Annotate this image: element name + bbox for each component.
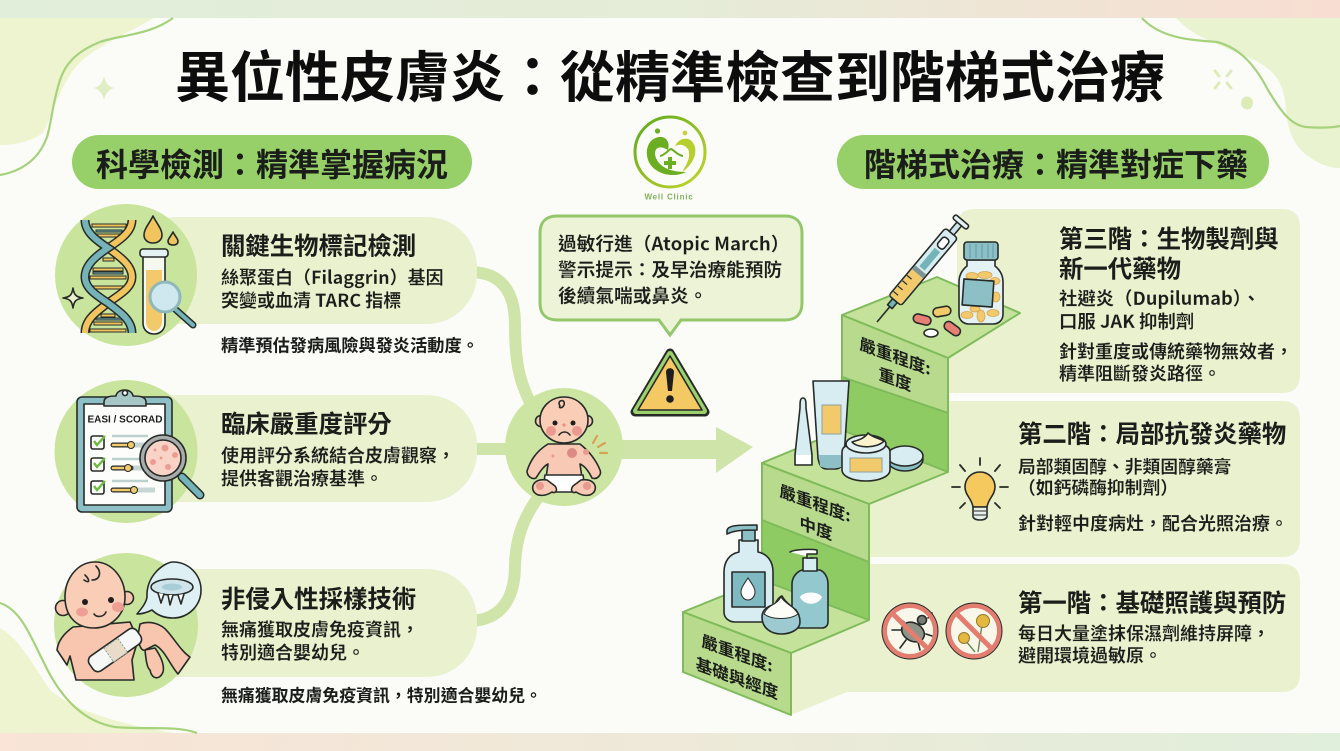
title: 異位性皮膚炎：從精準檢查到階梯式治療 — [175, 33, 1165, 113]
text: scoring: 使用評分系統結合皮膚觀察， — [221, 442, 455, 468]
text: biomarker — [221, 228, 479, 356]
panel: non-invasive sampling — [54, 553, 542, 706]
logo: Well Clinic — [635, 117, 705, 202]
heading pill: 階梯式治療: 階梯式治療：精準對症下藥 — [864, 140, 1248, 186]
icon: pill bottle and tablets — [912, 242, 1003, 338]
step: moderate: 中度 — [800, 509, 832, 545]
hub: baby with eczema — [505, 388, 623, 506]
text: sampling: 非侵入性採樣技術 — [221, 580, 416, 616]
panel: tier 3: 社避炎（Dupilumab）、 — [1059, 285, 1260, 311]
panel: tier 1: 每日大量塗抹保濕劑維持屏障， — [1018, 620, 1270, 646]
icon: no dust mites — [882, 603, 938, 659]
text: sampling — [221, 580, 542, 706]
panel: tier 2 — [869, 401, 1300, 557]
text: scoring — [221, 406, 455, 491]
step: severe: 嚴重程度: — [859, 330, 931, 380]
staircase — [683, 277, 1020, 715]
panel: tier 1: 第一階：基礎照護與預防 — [1018, 584, 1286, 620]
icon: clipboard EASI / SCORAD: EASI / SCORAD — [87, 414, 163, 426]
panel: biomarker test — [55, 204, 479, 356]
text: biomarker: 絲聚蛋白（Filaggrin）基因 — [221, 264, 444, 290]
panel: tier 1 — [791, 564, 1300, 715]
text: biomarker: 精準預估發病風險與發炎活動度。 — [221, 332, 479, 356]
panel: tier 3: 第三階：生物製劑與 — [1059, 220, 1279, 256]
step: basic: 基礎與經度 — [696, 650, 778, 704]
icon: clipboard EASI / SCORAD — [77, 390, 200, 512]
callout: atopic march: 警示提示：及早治療能預防 — [558, 256, 782, 282]
step: basic: 嚴重程度: — [701, 627, 773, 677]
panel: tier 2: 局部類固醇、非類固醇藥膏 — [1018, 453, 1231, 479]
callout: atopic march: 過敏行進（Atopic March） — [558, 230, 789, 256]
icon: no pollen — [946, 603, 1002, 659]
logo: Well Clinic: Well Clinic — [644, 192, 694, 202]
icon: syringe — [870, 214, 969, 328]
icon: moderate creams — [795, 381, 923, 481]
panel: tier 2: （如鈣磷酶抑制劑） — [1018, 474, 1178, 500]
step: moderate: 嚴重程度: — [779, 477, 851, 527]
panel: tier 2: 第二階：局部抗發炎藥物 — [1018, 416, 1286, 450]
panel: tier 3: 新一代藥物 — [1059, 250, 1181, 286]
icon: moisturisers — [724, 525, 828, 634]
arrow: hub to staircase — [615, 427, 753, 473]
panel: tier 3: 針對重度或傳統藥物無效者， — [1059, 338, 1293, 364]
text: scoring: 提供客觀治療基準。 — [221, 465, 383, 491]
panel: tier 3: 精準阻斷發炎路徑。 — [1059, 360, 1221, 386]
icon: DNA, test tube and magnifier — [63, 216, 193, 334]
heading pill: 科學檢測: 科學檢測：精準掌握病況 — [96, 140, 448, 186]
icon: baby with skin patch — [56, 562, 201, 680]
text: sampling: 特別適合嬰幼兒。 — [221, 639, 365, 665]
step: basic — [683, 580, 869, 715]
callout: atopic march — [540, 216, 802, 335]
flow connectors into hub — [470, 272, 540, 621]
callout: atopic march: 後續氣喘或鼻炎。 — [558, 282, 708, 308]
step: moderate — [762, 430, 948, 620]
panel: tier 3 — [948, 209, 1300, 393]
text: scoring: 臨床嚴重度評分 — [221, 406, 392, 440]
icon: light bulb — [952, 458, 1008, 520]
panel: tier 2: 針對輕中度病灶，配合光照治療。 — [1018, 510, 1288, 536]
panel: tier 3: 口服 JAK 抑制劑 — [1059, 308, 1194, 334]
icon: warning triangle — [635, 353, 705, 412]
step: severe: 重度 — [879, 360, 911, 396]
text: sampling: 無痛獲取皮膚免疫資訊， — [221, 616, 419, 642]
text: biomarker: 關鍵生物標記檢測 — [221, 228, 416, 262]
panel: clinical scoring — [54, 380, 477, 523]
step: severe — [842, 277, 1020, 504]
text: sampling: 無痛獲取皮膚免疫資訊，特別適合嬰幼兒。 — [221, 682, 542, 706]
panel: tier 1: 避開環境過敏原。 — [1018, 642, 1162, 668]
text: biomarker: 突變或血清 TARC 指標 — [221, 287, 401, 313]
